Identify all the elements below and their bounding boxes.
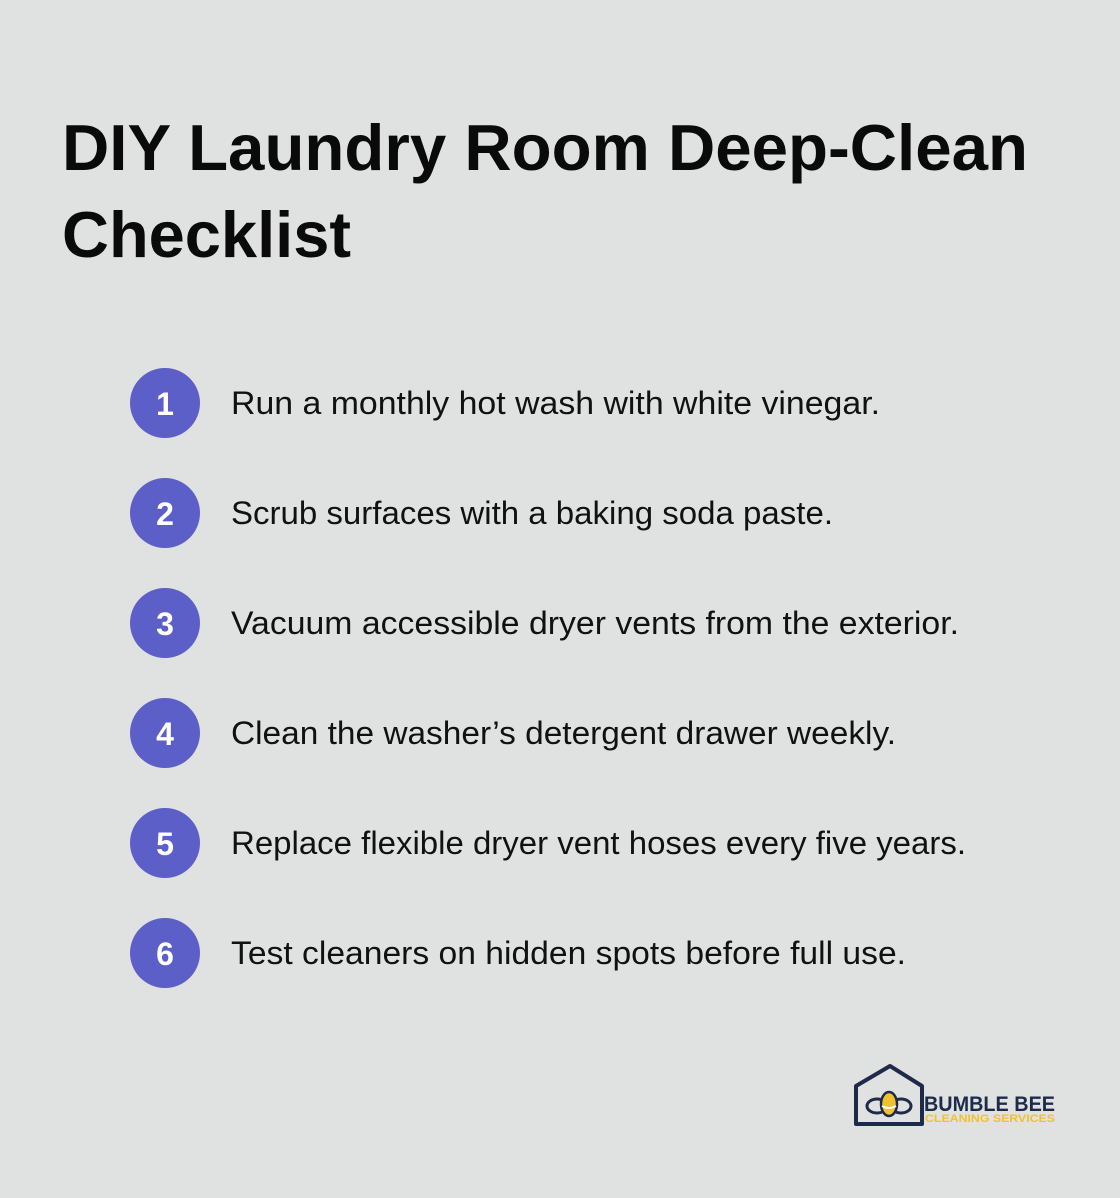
item 6: 6	[156, 936, 174, 972]
logo: CLEANING SERVICES	[925, 1113, 1055, 1125]
title	[62, 111, 1028, 271]
item 3: Vacuum accessible dryer vents from the exterior.	[231, 605, 959, 641]
title: Checklist	[62, 198, 351, 271]
item 4	[130, 698, 896, 768]
item 1	[130, 368, 880, 438]
icon: bee house	[856, 1066, 922, 1124]
item 1: Run a monthly hot wash with white vinegar.	[231, 385, 880, 421]
item 4: Clean the washer’s detergent drawer weekly.	[231, 715, 896, 751]
item 3	[130, 588, 959, 658]
item 2: Scrub surfaces with a baking soda paste.	[231, 495, 833, 531]
item 4: 4	[156, 716, 174, 752]
title: DIY Laundry Room Deep-Clean	[62, 111, 1028, 184]
logo text: BUMBLE BEE	[924, 1093, 1055, 1116]
item 5: 5	[156, 826, 174, 862]
item 6: Test cleaners on hidden spots before full use.	[231, 935, 906, 971]
checklist	[130, 368, 966, 988]
item 1: 1	[156, 386, 174, 422]
item 6	[130, 918, 906, 988]
item 5	[130, 808, 966, 878]
logo	[856, 1066, 1055, 1125]
item 3: 3	[156, 606, 174, 642]
item 5: Replace flexible dryer vent hoses every five years.	[231, 825, 966, 861]
item 2	[130, 478, 833, 548]
item 2: 2	[156, 496, 174, 532]
